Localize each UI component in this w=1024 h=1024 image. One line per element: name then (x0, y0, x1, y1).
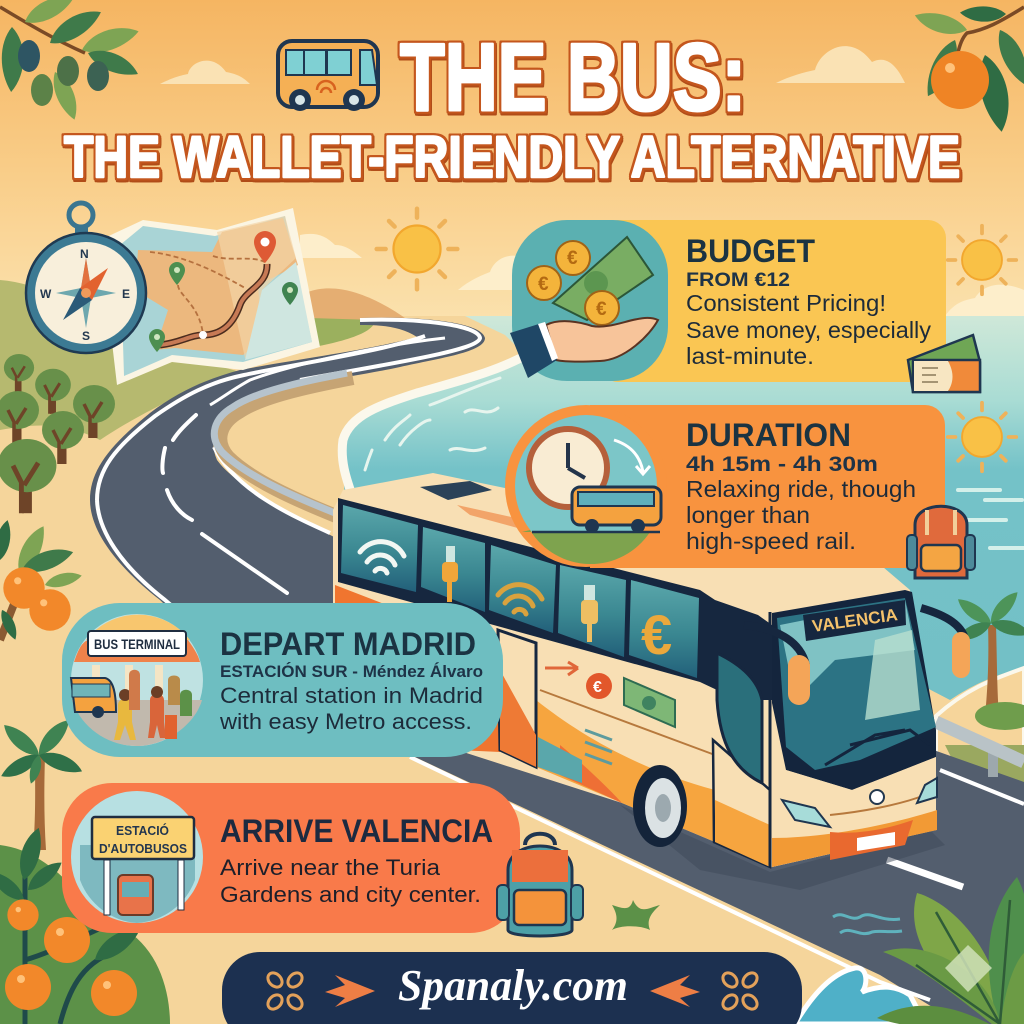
description: Relaxing ride, though (686, 476, 916, 502)
icon: wifi orange (498, 585, 542, 614)
door (498, 630, 536, 767)
orange tree left (0, 519, 83, 642)
compass: E (122, 287, 130, 301)
icon: sun (377, 209, 457, 289)
wipers (825, 730, 930, 765)
duration value: 4h 15m - 4h 30m (686, 453, 878, 476)
cloud far right (945, 285, 1024, 316)
small bus (532, 487, 661, 533)
map pin red (254, 231, 276, 263)
terminal sign: BUS TERMINAL (94, 636, 180, 652)
panel: arrive valencia (62, 783, 520, 933)
arrow (614, 440, 650, 474)
front corner (768, 612, 772, 867)
left mirror (744, 625, 810, 705)
icon: banknotes (553, 237, 653, 320)
euro on window: € (641, 603, 672, 666)
description: Save money, especially (686, 317, 932, 343)
icon: teal backpack (497, 834, 583, 936)
duration icon (505, 405, 667, 567)
roof hatch (420, 481, 492, 500)
station small bus (118, 875, 153, 915)
roadside green right (945, 745, 1024, 790)
guard rail (214, 373, 353, 518)
waves right (957, 490, 1024, 548)
icon: euro coins: € (538, 274, 549, 295)
ornament right (720, 970, 760, 1012)
description: longer than (686, 502, 810, 528)
panel: depart madrid (62, 603, 503, 757)
beach right (936, 668, 1024, 770)
compass (26, 203, 146, 353)
small plant (612, 900, 660, 930)
map pin green low (149, 329, 165, 352)
bus (333, 473, 970, 867)
road (90, 318, 1024, 1024)
right mirror (921, 608, 970, 678)
travellers (114, 670, 192, 740)
description (220, 855, 481, 907)
map (100, 208, 320, 385)
description: Gardens and city center. (220, 882, 481, 907)
wave bottom right (795, 968, 925, 1024)
roof strip (457, 505, 525, 530)
icon: orange backpack (907, 506, 975, 578)
heading: ARRIVE VALENCIA (220, 813, 493, 849)
tropical leaves bottom right (877, 877, 1024, 1024)
icon: euro coins: € (567, 248, 578, 269)
vent lines (585, 730, 612, 764)
station sign (92, 817, 194, 859)
side seam (540, 690, 715, 755)
description: Central station in Madrid (220, 683, 483, 708)
icon: open hand (510, 318, 658, 378)
green hill (0, 280, 240, 440)
heading: DURATION (686, 417, 851, 453)
guard rail right (936, 722, 1024, 777)
description (686, 476, 916, 554)
windows (341, 505, 699, 678)
front side window (717, 653, 762, 783)
orange branch top right (912, 4, 1024, 134)
title (64, 24, 960, 190)
cloud mid (458, 256, 525, 290)
terminal illustration (71, 614, 203, 746)
palm tree left (0, 715, 85, 850)
front bumper (772, 757, 936, 867)
station: ESTACIÓN SUR - Méndez Álvaro (220, 662, 483, 681)
station sign: D'AUTOBUSOS (99, 841, 187, 856)
sandy ground (0, 316, 1024, 1024)
cloud right (776, 46, 905, 83)
description: last-minute. (686, 343, 814, 369)
icon: usb plug (581, 585, 598, 642)
route (160, 264, 267, 345)
compass: W (40, 287, 52, 301)
compass: S (82, 329, 90, 343)
clock (529, 429, 607, 507)
green hill right (295, 318, 375, 350)
usb symbol (545, 662, 578, 675)
arrow right (650, 975, 700, 1007)
small trees left (0, 354, 115, 513)
sea foam (342, 353, 530, 495)
wheel (633, 765, 687, 847)
palm tree right (954, 588, 1024, 730)
heading: BUDGET (686, 233, 815, 269)
emblem (870, 790, 884, 804)
icon: sun small top (948, 226, 1016, 294)
licence plate (857, 832, 895, 851)
icon: title bus (278, 41, 378, 111)
terminal bus (71, 678, 116, 718)
right headlight (917, 778, 937, 803)
icon: sun small lower (948, 403, 1016, 471)
arrow left (325, 975, 375, 1007)
description: high-speed rail. (686, 528, 856, 554)
brand: Spanaly.com (398, 961, 628, 1010)
panel: duration (505, 405, 945, 568)
budget icon background (512, 220, 668, 381)
compass: N (80, 247, 89, 261)
cloud behind map (300, 234, 362, 258)
banknote (624, 678, 675, 727)
lane centre dashes (162, 415, 287, 593)
lane dash front (887, 860, 963, 887)
window band (338, 498, 772, 700)
front door panel (713, 740, 770, 867)
destination sign (803, 600, 906, 641)
description: Arrive near the Turia (220, 855, 441, 880)
windshield glass (777, 598, 936, 770)
station sign: ESTACIÓ (116, 823, 169, 838)
map pin green right (282, 282, 298, 305)
icon: euro coins (527, 241, 619, 325)
bus roof and body (333, 473, 936, 867)
ornament left (265, 970, 305, 1012)
station illustration (71, 791, 203, 923)
panel: budget (510, 220, 946, 382)
heading: DEPART MADRID (220, 626, 476, 662)
description (686, 290, 932, 369)
rear stripes (335, 585, 500, 752)
map pin green (169, 262, 185, 285)
title: THE BUS: (400, 24, 746, 131)
left headlight (782, 800, 830, 827)
icon: tickets (908, 335, 980, 392)
description: Consistent Pricing! (686, 290, 886, 316)
lane line far (210, 338, 445, 405)
bottom left orange bush (0, 825, 170, 1024)
body stripes lower (536, 700, 715, 842)
destination sign: VALENCIA (811, 605, 899, 636)
price: FROM €12 (686, 270, 790, 291)
cloud left (160, 61, 250, 84)
bus shadow (620, 805, 945, 890)
footer banner (222, 952, 802, 1024)
sea ripples (365, 378, 500, 470)
olive branch top left (0, 0, 142, 123)
windshield frame (772, 590, 936, 790)
background sky (0, 0, 1024, 340)
seam (830, 795, 925, 815)
icon: euro coins: € (596, 299, 607, 320)
sea (342, 316, 1024, 700)
euro badge (586, 673, 612, 699)
description (219, 683, 483, 734)
description: with easy Metro access. (219, 709, 472, 734)
euro badge: € (593, 679, 602, 696)
water ripples (833, 915, 902, 934)
road edge line (97, 320, 1024, 1000)
tan hill (308, 288, 408, 320)
icon: charger (442, 546, 458, 602)
icon: wifi white (360, 542, 404, 573)
